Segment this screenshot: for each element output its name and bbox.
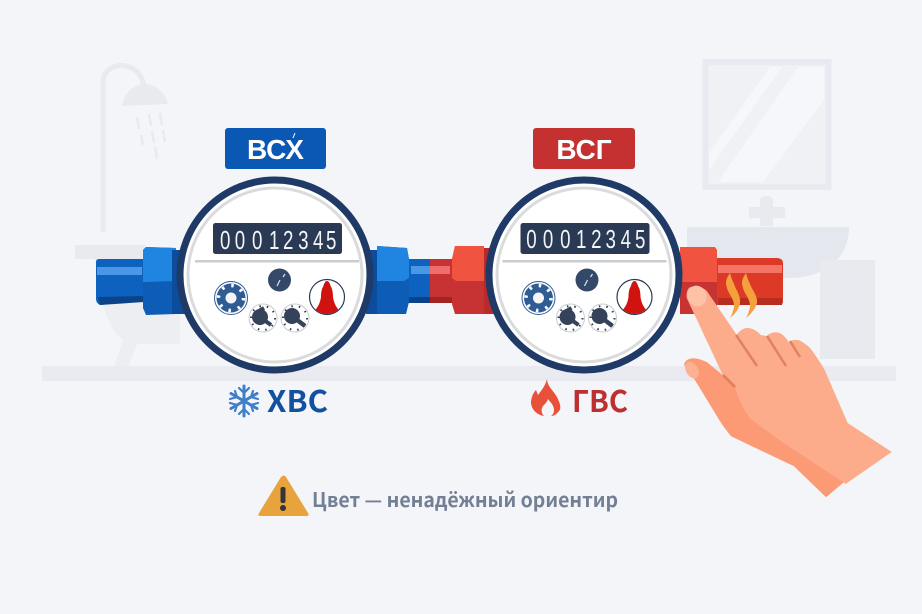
dials and display (502, 223, 666, 332)
thumb and back of hand (684, 358, 845, 497)
label: ХВС: ХВС (267, 377, 328, 421)
label: ГВС: ГВС (572, 377, 628, 421)
bathroom backdrop (42, 62, 896, 381)
right pipe: hot (680, 247, 783, 314)
badge: ВСХ: ВСХ (247, 134, 304, 165)
badge: ВСГ: ВСГ (556, 134, 612, 165)
icon: snowflake (230, 386, 258, 416)
meter: cold (180, 180, 370, 370)
floor (42, 366, 896, 381)
icon: bathtub (75, 245, 180, 367)
icon: sink (687, 196, 875, 359)
counter digits: 00012345 (220, 225, 336, 255)
icon: warning triangle (258, 476, 309, 516)
left pipe: cold (96, 247, 186, 315)
middle pipe: cold to hot (366, 246, 496, 314)
dials and display (195, 223, 359, 332)
icon: shower (103, 65, 168, 232)
warning (258, 476, 618, 516)
palm and index finger (687, 286, 892, 484)
badge: ВСХ (225, 128, 326, 169)
icon: heat waves (726, 273, 757, 318)
label: ХВС (230, 377, 328, 421)
icon: flame (531, 379, 560, 416)
meter: hot (489, 180, 679, 370)
warning: Цвет — ненадёжный ориентир (312, 484, 618, 513)
badge: ВСГ (533, 128, 635, 169)
icon: pointing hand (682, 282, 892, 497)
label: ГВС (531, 377, 628, 421)
icon: mirror (706, 62, 828, 187)
counter digits: 00012345 (526, 224, 645, 254)
